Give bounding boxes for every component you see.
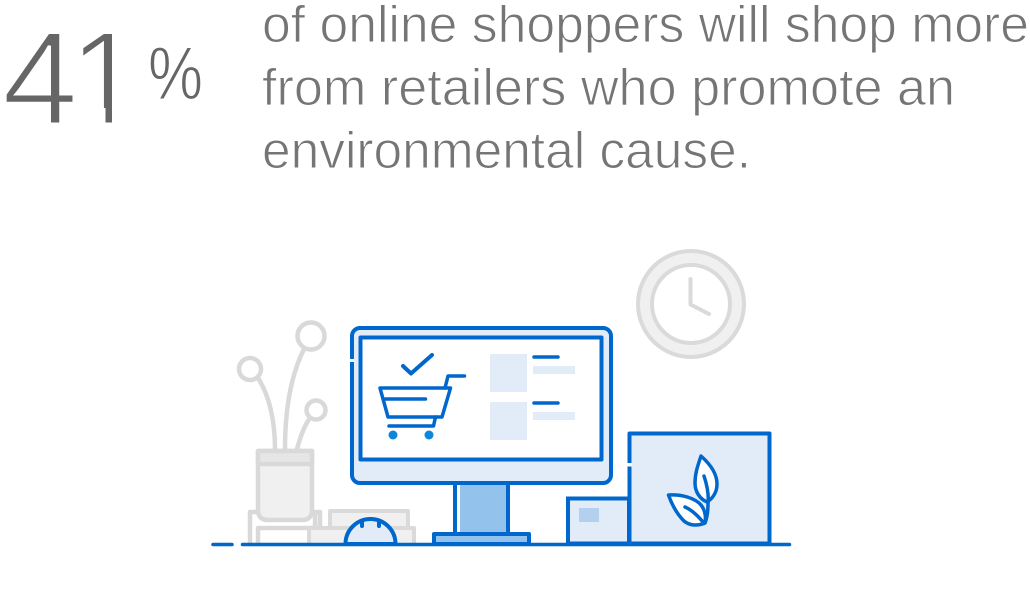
books and dome device <box>309 511 414 544</box>
icon: wall clock <box>638 251 744 357</box>
statistic: 41 percent: % <box>148 31 203 115</box>
description text: from retailers who promote an <box>262 59 955 117</box>
books <box>309 511 414 544</box>
statistic: 41 percent: 4 <box>2 5 78 153</box>
icon: shopping cart <box>380 376 464 440</box>
icon: plant in pot on chair <box>239 322 326 544</box>
description text: environmental cause. <box>262 122 751 180</box>
icon: check mark <box>403 355 432 374</box>
monitor <box>349 328 611 544</box>
statistic: 41 percent <box>2 5 203 153</box>
monitor bezel <box>352 328 611 483</box>
icon: leaves <box>668 456 717 525</box>
statistic: 41 percent: 1 <box>69 5 143 153</box>
monitor screen <box>360 338 602 460</box>
large eco box with leaf icon <box>627 434 770 544</box>
description text <box>262 0 1029 180</box>
monitor stand <box>434 483 529 544</box>
small parcel box <box>568 498 629 544</box>
product list <box>490 354 575 440</box>
dome device <box>346 519 396 544</box>
ground line <box>213 543 790 546</box>
